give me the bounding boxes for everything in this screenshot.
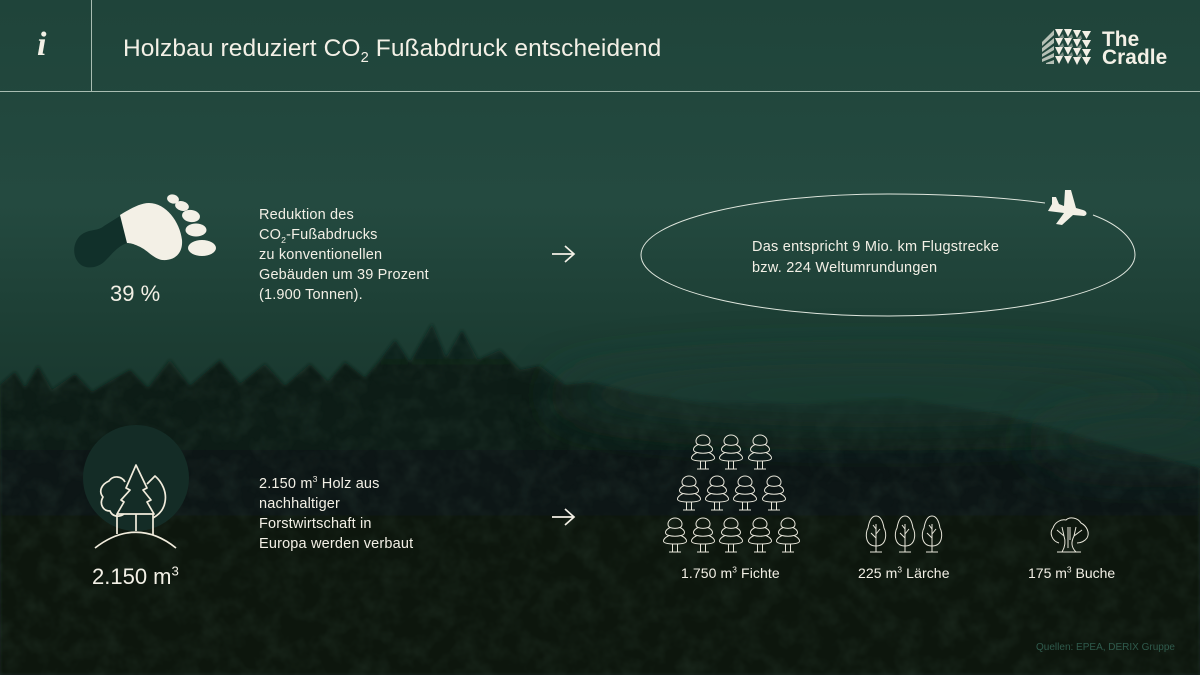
text: flight equivalent	[752, 239, 999, 276]
text: flight equivalent: Das entspricht 9 Mio. km Flugstrecke	[752, 239, 999, 255]
logo: The Cradle	[1042, 28, 1167, 69]
text: timber: Forstwirtschaft in	[259, 516, 372, 532]
text: CO2 reduction	[259, 207, 429, 303]
stat: 2.150 m3: 2.150 m3	[92, 564, 179, 589]
logo wordmark: The	[1102, 28, 1139, 51]
label: beech: 175 m3 Buche	[1028, 564, 1115, 581]
arrow	[552, 245, 576, 263]
text: timber	[259, 474, 414, 552]
header bar	[0, 0, 1200, 92]
hill	[95, 532, 176, 548]
text: CO2 reduction: Gebäuden um 39 Prozent	[259, 267, 429, 283]
logo mark	[1042, 29, 1091, 65]
icon: info: i	[37, 26, 46, 63]
text: CO2 reduction: Reduktion des	[259, 207, 354, 223]
text: flight equivalent: bzw. 224 Weltumrundungen	[752, 260, 937, 276]
logo wordmark	[1102, 28, 1167, 69]
title: Holzbau reduziert CO2 Fußabdruck entscheidend	[123, 35, 661, 66]
text: CO2 reduction: CO2-Fußabdrucks	[259, 227, 378, 245]
light forefoot part	[120, 203, 182, 260]
icon: trees on hill	[83, 425, 189, 549]
pointed tree	[147, 476, 165, 518]
header divider	[91, 0, 92, 91]
text: CO2 reduction: (1.900 Tonnen).	[259, 287, 363, 303]
spruce trees	[663, 434, 800, 552]
text: timber: Europa werden verbaut	[259, 536, 413, 552]
label: larch: 225 m3 Lärche	[858, 564, 950, 581]
logo wordmark: Cradle	[1102, 46, 1167, 69]
arrow	[552, 508, 576, 526]
text: timber: 2.150 m3 Holz aus	[259, 474, 380, 492]
trunks	[117, 514, 153, 535]
sources: Quellen: EPEA, DERIX Gruppe	[1036, 642, 1175, 653]
beech tree	[1050, 517, 1089, 552]
flight ellipse with plane	[640, 190, 1136, 316]
spruce	[117, 465, 154, 514]
text: timber: nachhaltiger	[259, 496, 340, 512]
larch trees	[866, 516, 942, 552]
toes	[166, 193, 216, 256]
icon: plane	[1048, 190, 1087, 225]
icon: footprint	[74, 194, 216, 268]
label: spruce: 1.750 m3 Fichte	[681, 564, 780, 581]
stat: 39 %: 39 %	[110, 281, 160, 306]
text: CO2 reduction: zu konventionellen	[259, 247, 382, 263]
dark heel part	[74, 216, 127, 267]
round tree	[101, 477, 125, 516]
ellipse path	[641, 194, 1135, 316]
